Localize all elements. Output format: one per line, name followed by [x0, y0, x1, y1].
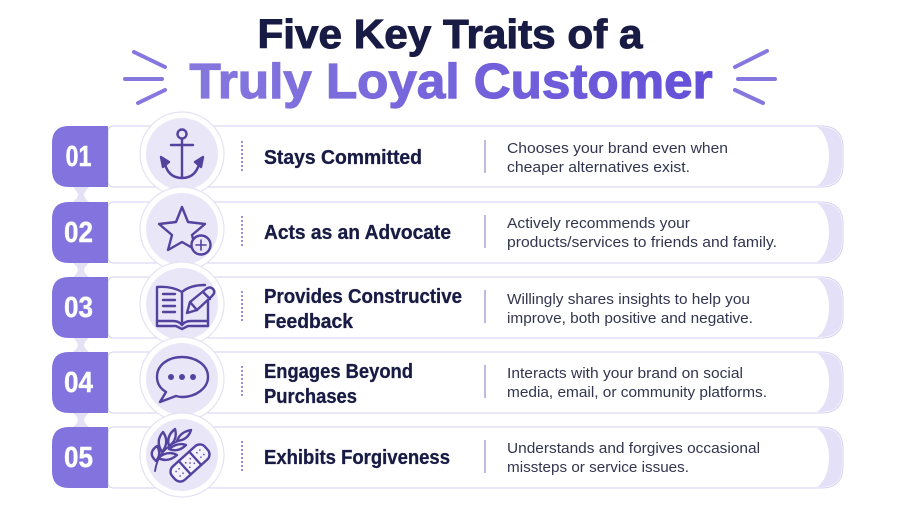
panel: row 4: 04: [64, 367, 93, 399]
panel: row 4: Purchases: [264, 386, 357, 408]
panel: row 2: Actively recommends your: [507, 216, 690, 232]
icon: right sparkle lines: [735, 51, 775, 103]
panel: row 3: Provides Constructive: [264, 286, 462, 308]
panel: row 2: products/services to friends and family.: [507, 235, 777, 251]
panel: row 5: Exhibits Forgiveness: [264, 447, 450, 469]
panel: row 3: 03: [64, 292, 93, 324]
panel: row 5: 05: [64, 442, 93, 474]
panel: row 5: [52, 427, 843, 488]
panel: row 2: Acts as an Advocate: [264, 222, 451, 244]
icon: star with plus: [140, 187, 224, 271]
panel: row 1: Stays Committed: [264, 147, 422, 169]
panel: row 4: Engages Beyond: [264, 361, 413, 383]
panel: row 3: improve, both positive and negative.: [507, 311, 753, 327]
panel: row 5: Understands and forgives occasional: [507, 441, 760, 457]
icon: anchor: [140, 112, 224, 196]
panel: row 5: missteps or service issues.: [507, 460, 689, 476]
title: Truly Loyal Customer: [190, 55, 712, 109]
icon: olive branch and bandage: [140, 413, 224, 497]
icon: open book with pencil: [140, 262, 224, 346]
panel: row 2: [52, 202, 843, 263]
panel: row 4: [52, 352, 843, 413]
icon: speech bubble: [140, 337, 224, 421]
title: [190, 11, 712, 109]
panel: row 1: 01: [66, 141, 92, 173]
panel: row 3: Feedback: [264, 311, 354, 333]
panel: row 1: cheaper alternatives exist.: [507, 160, 690, 176]
panel: row 3: Willingly shares insights to help you: [507, 292, 750, 308]
icon: left sparkle lines: [125, 52, 165, 103]
panel: row 1: Chooses your brand even when: [507, 141, 728, 157]
connectors between number tabs: [72, 186, 90, 428]
panel: row 2: 02: [64, 217, 93, 249]
title: Five Key Traits of a: [258, 11, 644, 57]
panel: row 3: [52, 277, 843, 338]
panel: row 1: [52, 126, 843, 187]
panel: row 4: media, email, or community platforms.: [507, 385, 767, 401]
panel: row 4: Interacts with your brand on social: [507, 366, 743, 382]
